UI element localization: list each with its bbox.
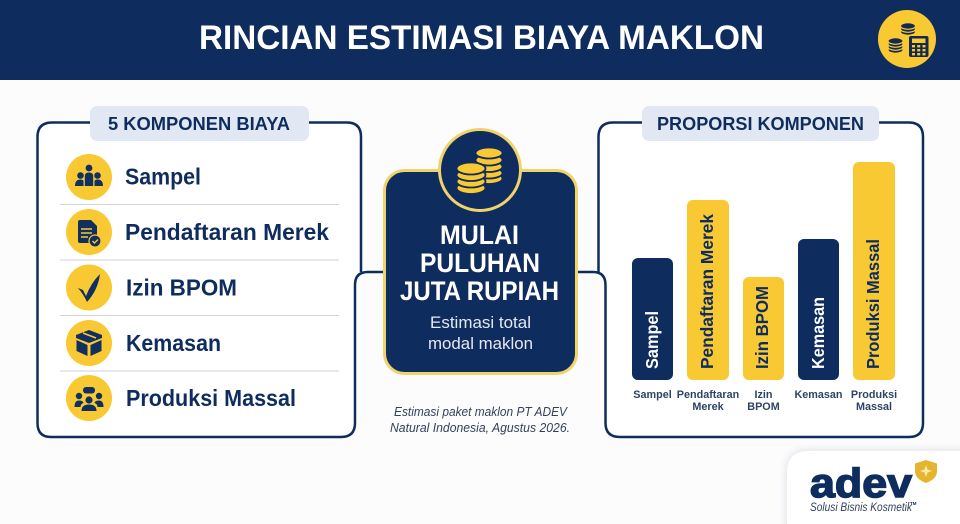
subtext: Estimasi total	[430, 313, 531, 332]
panel: proporsi komponen	[577, 106, 923, 437]
icon: gold shield	[915, 460, 937, 483]
axis labels: BPOM	[747, 401, 780, 413]
bar: Sampel	[632, 258, 673, 380]
axis labels: Pendaftaran	[677, 389, 739, 401]
axis labels: Kemasan	[794, 389, 843, 401]
logo card: TM	[910, 501, 917, 506]
tagline: Solusi Bisnis Kosmetik	[810, 502, 913, 514]
header	[0, 0, 960, 80]
axis labels: Merek	[692, 401, 725, 413]
headline: JUTA RUPIAH	[400, 276, 559, 306]
panel: 5 komponen biaya	[38, 106, 384, 437]
heading pill	[642, 106, 879, 141]
heading pill: 5 KOMPONEN BIAYA	[108, 114, 290, 134]
row: Izin BPOM	[66, 264, 237, 310]
heading pill: PROPORSI KOMPONEN	[657, 114, 864, 134]
headline: MULAI	[440, 220, 519, 250]
row: Pendaftaran Merek: Pendaftaran Merek	[125, 219, 329, 245]
bar: Kemasan: Kemasan	[808, 297, 828, 369]
headline	[400, 220, 559, 306]
icon: coins and calculator	[878, 10, 936, 68]
logo card	[786, 450, 960, 524]
row: Kemasan: Kemasan	[126, 330, 221, 356]
axis labels: Massal	[856, 401, 892, 413]
footnote	[390, 405, 570, 435]
bar: Produksi Massal	[853, 162, 895, 380]
bar: Produksi Massal: Produksi Massal	[863, 239, 883, 369]
footnote: Estimasi paket maklon PT ADEV	[394, 405, 569, 419]
bar chart	[632, 162, 897, 413]
subtext	[428, 313, 533, 353]
axis labels	[633, 389, 897, 413]
row: Produksi Massal	[66, 375, 296, 421]
row: Sampel: Sampel	[125, 164, 201, 190]
center callout	[384, 130, 576, 374]
row: Produksi Massal: Produksi Massal	[126, 385, 296, 411]
heading pill	[90, 106, 309, 141]
bar: Pendaftaran Merek	[687, 200, 729, 380]
footnote: Natural Indonesia, Agustus 2026.	[390, 421, 570, 435]
bar: Izin BPOM	[743, 277, 784, 380]
headline: PULUHAN	[420, 248, 540, 278]
row: Pendaftaran Merek	[66, 209, 329, 255]
row: Izin BPOM: Izin BPOM	[126, 274, 237, 300]
bar: Sampel: Sampel	[642, 311, 662, 369]
axis labels: Izin	[754, 389, 772, 401]
title: RINCIAN ESTIMASI BIAYA MAKLON	[199, 19, 764, 57]
subtext: modal maklon	[428, 334, 533, 353]
icon: gold coins	[440, 130, 520, 210]
axis labels: Sampel	[633, 389, 672, 401]
bar: Kemasan	[798, 239, 839, 380]
bar: Pendaftaran Merek: Pendaftaran Merek	[697, 214, 717, 369]
row: Kemasan	[66, 320, 221, 366]
row: Sampel	[66, 154, 201, 200]
logo wordmark: adev	[810, 460, 912, 506]
axis labels: Produksi	[851, 389, 897, 401]
bar: Izin BPOM: Izin BPOM	[752, 286, 772, 369]
